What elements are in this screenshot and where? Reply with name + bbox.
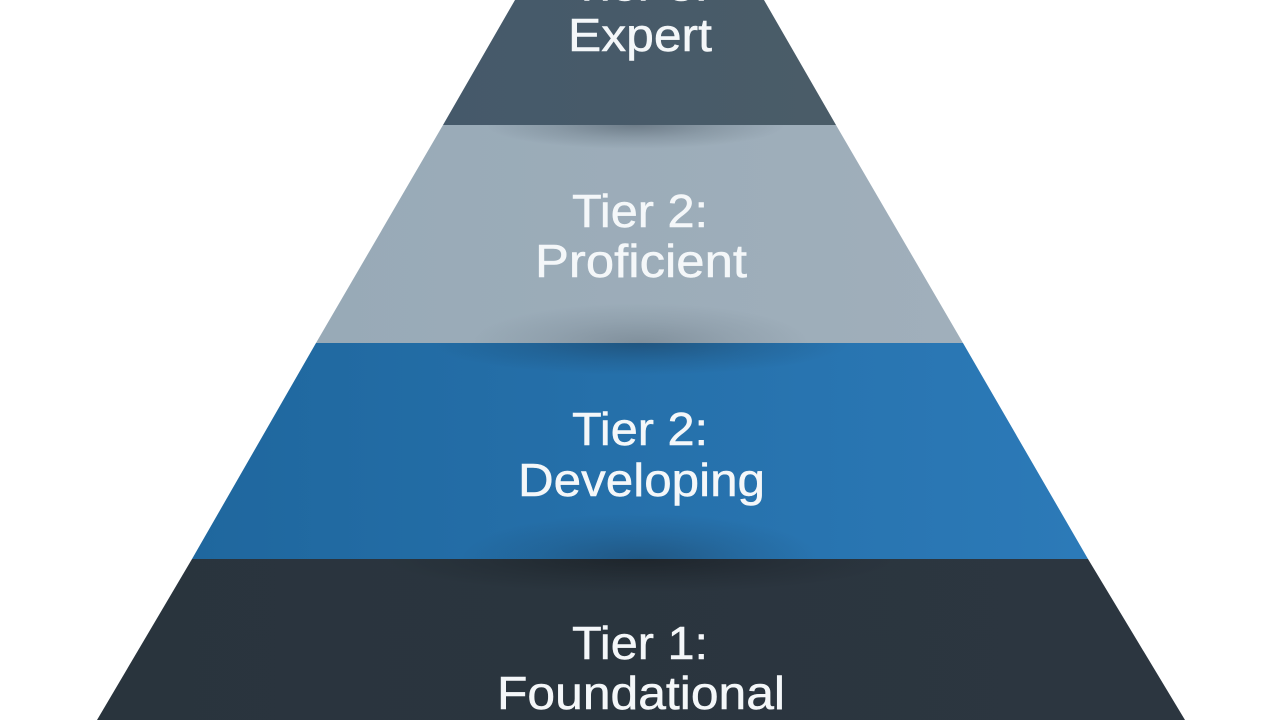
tier: foundational xyxy=(97,559,1185,720)
tier: proficient xyxy=(316,125,963,343)
tier: expert xyxy=(443,0,836,125)
tier: foundational: Tier 1: xyxy=(572,617,708,669)
tier: developing: Tier 2: xyxy=(572,403,708,455)
tier: foundational: Foundational xyxy=(497,667,785,719)
tier: developing xyxy=(192,343,1088,559)
tier: developing: Developing xyxy=(518,454,765,506)
tier: expert: Expert xyxy=(568,9,712,61)
tier: proficient: Tier 2: xyxy=(572,185,708,237)
tier: proficient: Proficient xyxy=(535,235,747,287)
